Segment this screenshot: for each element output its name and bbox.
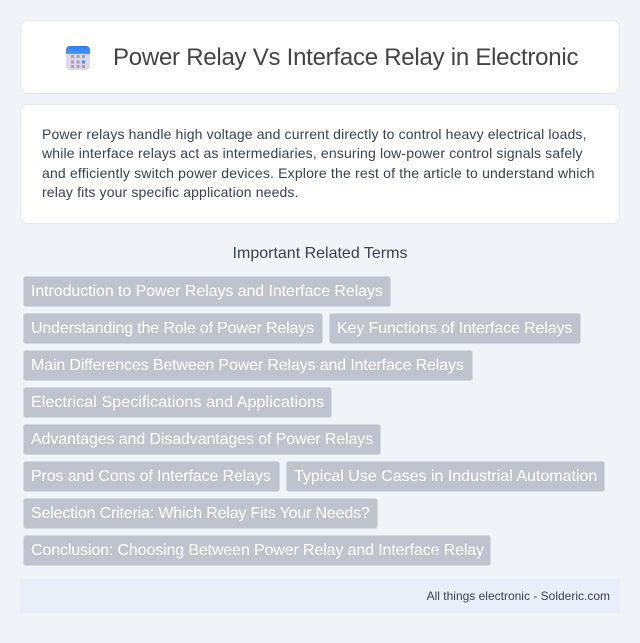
title: Power Relay Vs Interface Relay in Electronic xyxy=(113,44,578,71)
summary text xyxy=(42,126,595,200)
header card xyxy=(20,20,620,94)
tag xyxy=(23,424,381,455)
icon: calendar xyxy=(66,46,90,70)
tag xyxy=(23,498,378,529)
summary text: while interface relays act as intermediaries, ensuring low-power control signals safely xyxy=(42,145,583,161)
tag xyxy=(23,350,473,381)
tag xyxy=(23,387,332,418)
tag: Typical Use Cases in Industrial Automation xyxy=(294,468,597,485)
tag: Advantages and Disadvantages of Power Relays xyxy=(31,431,373,448)
tag xyxy=(23,535,491,566)
summary text: and efficiently switch power devices. Explore the rest of the article to understand which xyxy=(42,165,595,181)
related term tags xyxy=(23,276,605,566)
tag: Introduction to Power Relays and Interface Relays xyxy=(31,283,383,300)
tag: Understanding the Role of Power Relays xyxy=(31,320,314,337)
section heading: Important Related Terms xyxy=(233,245,407,262)
footer text: All things electronic - Solderic.com xyxy=(427,589,610,603)
tag xyxy=(23,313,323,344)
summary text: Power relays handle high voltage and current directly to control heavy electrical loads, xyxy=(42,126,587,142)
footer xyxy=(20,579,620,613)
tag: Key Functions of Interface Relays xyxy=(337,320,572,337)
tag xyxy=(23,461,280,492)
tag xyxy=(23,276,391,307)
tag xyxy=(329,313,581,344)
tag: Selection Criteria: Which Relay Fits Your Needs? xyxy=(31,505,370,522)
tag: Conclusion: Choosing Between Power Relay and Interface Relay xyxy=(31,542,484,559)
summary text: relay fits your specific application needs. xyxy=(42,184,299,200)
summary card xyxy=(20,104,620,224)
tag: Main Differences Between Power Relays and Interface Relays xyxy=(31,357,464,374)
tag: Pros and Cons of Interface Relays xyxy=(31,468,271,485)
tag: Electrical Specifications and Applications xyxy=(31,394,324,411)
tag xyxy=(286,461,605,492)
